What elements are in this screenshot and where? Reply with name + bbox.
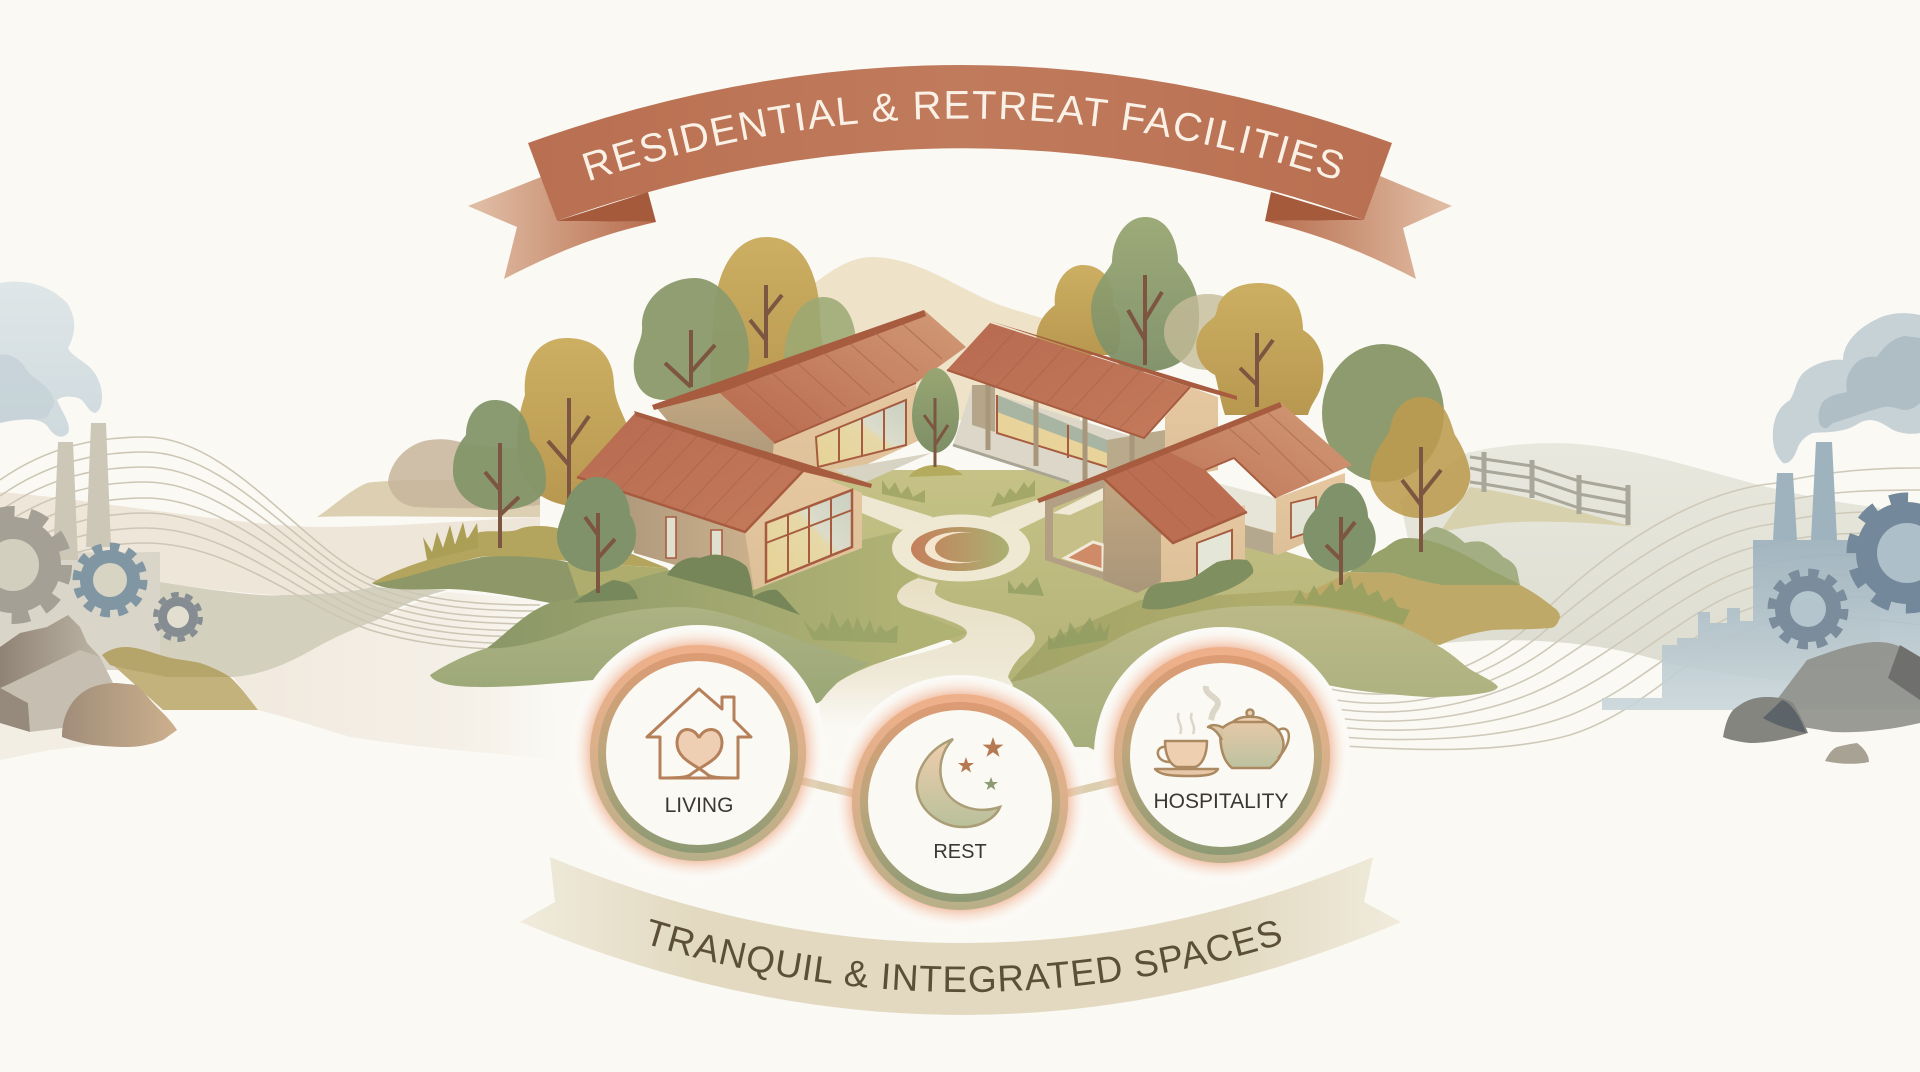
right green mound xyxy=(1350,538,1520,585)
left front green tree xyxy=(557,477,638,603)
left factory chimneys xyxy=(53,423,111,560)
bush beside front-right building xyxy=(1142,559,1253,610)
ribbon band xyxy=(528,65,1392,221)
right rocks xyxy=(1723,642,1920,764)
back tan hill xyxy=(800,257,1080,420)
ribbon folds xyxy=(557,192,1364,222)
right front green tree xyxy=(1303,483,1376,585)
left distant hills xyxy=(317,439,540,517)
grass tufts xyxy=(803,480,1410,650)
right back bush xyxy=(1400,527,1520,600)
left rear olive land xyxy=(480,557,672,607)
back green tree right xyxy=(784,297,856,360)
label: hospitality: HOSPITALITY xyxy=(1154,790,1288,813)
right gold overlap tree xyxy=(1370,397,1470,552)
right gold lobe xyxy=(1293,572,1560,645)
left pastel haze bands xyxy=(0,492,560,760)
circle: living xyxy=(572,627,824,879)
back green tree left xyxy=(634,278,749,400)
left dark green lobe xyxy=(372,556,580,603)
left gold tree xyxy=(517,338,631,540)
left medium green land xyxy=(487,530,967,703)
title: RESIDENTIAL & RETREAT FACILITIES xyxy=(582,91,1344,180)
top ribbon xyxy=(468,65,1452,279)
ribbon tails xyxy=(468,176,1452,279)
right tall green tree xyxy=(1091,217,1199,372)
translucent tan tree xyxy=(1164,294,1252,370)
left grass tuft xyxy=(423,522,478,560)
bush beside front-left building xyxy=(667,555,800,615)
front-left building xyxy=(577,411,872,590)
bottom ribbon xyxy=(520,857,1400,1015)
right olive band xyxy=(1010,590,1350,682)
tagline: TRANQUIL & INTEGRATED SPACES xyxy=(650,918,1281,992)
left small green tree xyxy=(453,400,546,548)
left large gear xyxy=(0,512,66,618)
left light green lobe xyxy=(430,607,870,720)
left small gear xyxy=(156,594,200,640)
right tan hill under fence xyxy=(1440,487,1633,532)
winding garden paths xyxy=(812,495,1045,790)
right factory silhouette xyxy=(1602,442,1920,710)
courtyard small tree xyxy=(909,368,963,477)
left smoke cloud xyxy=(0,282,102,437)
right pastel haze hill xyxy=(1400,443,1880,683)
circle: hospitality xyxy=(1096,629,1348,881)
icon: steam xyxy=(1178,686,1218,734)
right yellow tree behind xyxy=(1036,265,1120,355)
circle connectors xyxy=(802,781,1118,794)
label: living: LIVING xyxy=(665,794,733,817)
right wave lines xyxy=(1330,468,1920,749)
left gold strip xyxy=(372,526,667,585)
icon: house with heart xyxy=(647,689,751,778)
ribbon band xyxy=(520,857,1401,1015)
icon: teacup and teapot xyxy=(1155,710,1289,776)
front-right building xyxy=(1037,402,1352,595)
back-right building xyxy=(947,321,1237,500)
circle halos xyxy=(570,625,1350,929)
label: rest: REST xyxy=(933,841,987,863)
icon: crescent moon and stars xyxy=(917,737,1004,827)
left wave lines xyxy=(0,437,540,650)
right large gear xyxy=(1852,498,1920,608)
right smoke cloud xyxy=(1773,313,1920,463)
right light green lobe xyxy=(1010,606,1498,800)
left medium gear xyxy=(76,546,144,614)
back yellow tree xyxy=(710,237,827,410)
right big green tree xyxy=(1322,344,1444,482)
back-left building xyxy=(652,310,966,495)
island base lawn xyxy=(640,470,1350,690)
left rocks xyxy=(0,615,177,747)
circle: rest xyxy=(834,676,1086,928)
right gold tree xyxy=(1196,283,1323,415)
fence xyxy=(1470,452,1628,525)
left ochre mound xyxy=(102,647,258,710)
roundabout with crescent xyxy=(892,514,1030,582)
right small gear xyxy=(1772,572,1844,646)
